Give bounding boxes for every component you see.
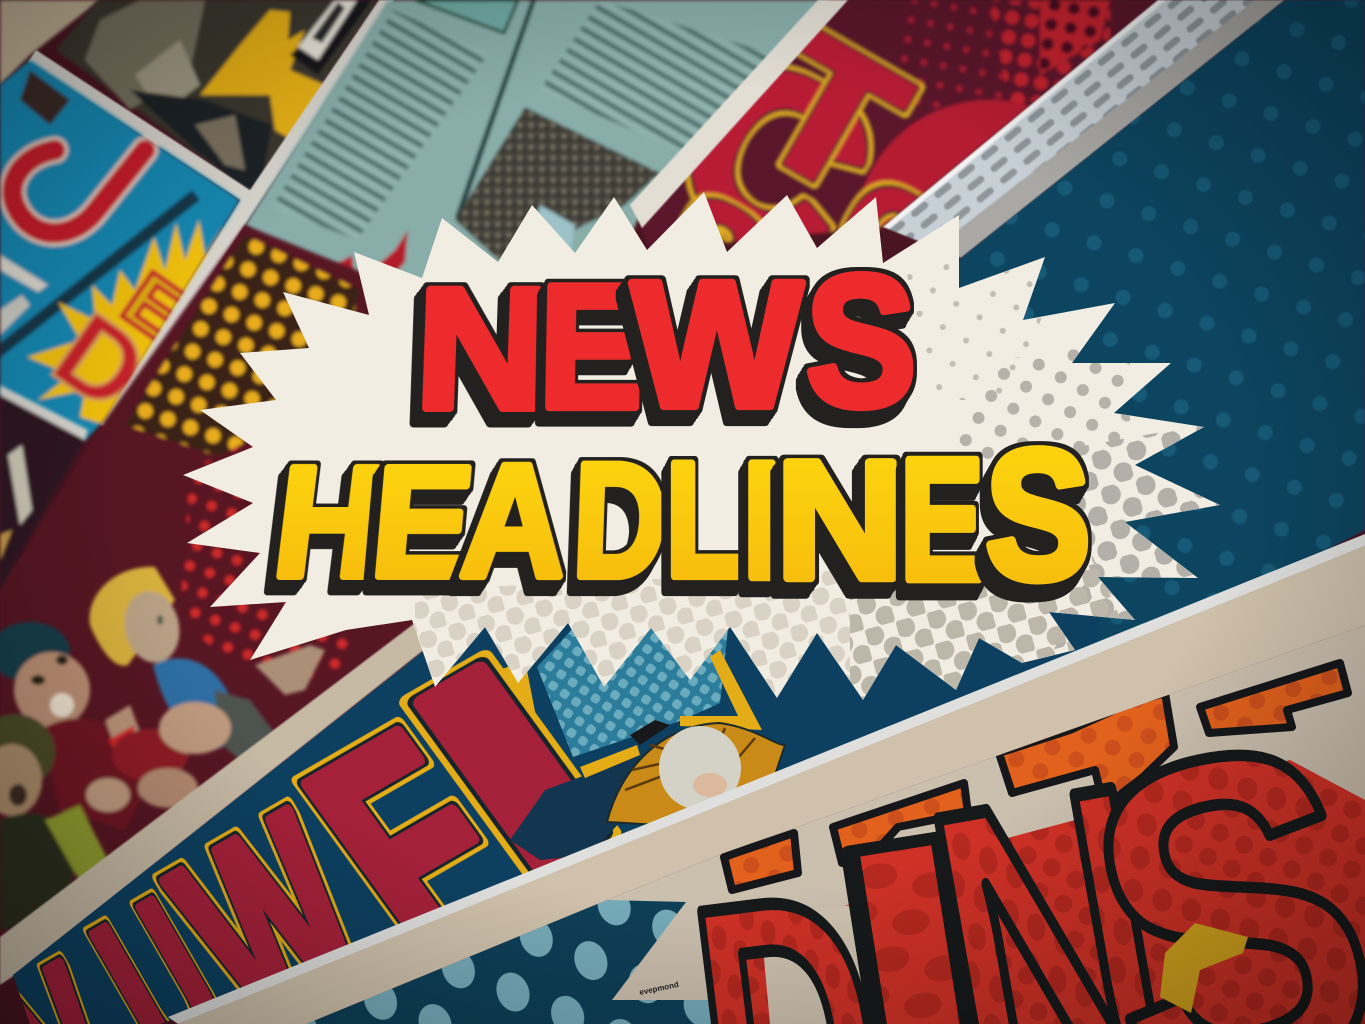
word: HEADLINES: D [570,430,670,610]
word: HEADLINES: I [742,428,782,612]
word: NEWS [413,238,916,445]
word: NEWS: S [806,238,916,445]
illustration: cartoon group of kids [0,567,325,930]
halftone: tiny dots [905,260,1060,400]
panel: navy with red yellow letters [0,600,1100,1024]
word: HEADLINES: S [986,412,1090,618]
panel: lower comic with DINS lettering [300,620,1365,1024]
panel: beige top-left corner [0,0,100,85]
word: HEADLINES: E [900,422,984,616]
orange letter tops [724,663,1348,890]
word: HEADLINES: A [457,432,571,611]
word: HEADLINES: N [776,426,904,614]
panel: navy with red yellow letters: F [258,677,563,1008]
kid: red cap and hands [86,702,231,812]
halftone dense [1040,0,1110,75]
top frame [415,0,518,33]
halftone: gray lower band [850,550,1130,710]
photo in newspaper [455,107,660,265]
halftone: small dots [940,340,1130,500]
word: NEWS: E [538,249,644,445]
panel: silver strip [883,0,1285,258]
D counter backing [760,905,865,1024]
letters DINS [673,640,1365,1024]
panel: teal newspaper page [245,0,830,310]
word: NEWS: N [413,253,551,445]
lower cream strip with white edge [168,534,1365,1024]
panel: blue comic with red J and star [0,60,240,440]
star patch [1160,923,1248,1013]
comic letter E: E [108,255,201,357]
text column left [272,10,489,240]
halftone: beige lower band [415,570,850,710]
panel: maroon with yellow ornate letters: C [817,155,960,314]
signature: evepmond [639,980,680,997]
kid: curly [0,714,108,930]
word: HEADLINES: H [266,434,391,609]
word: HEADLINES: E [366,435,480,610]
panel: navy with red yellow letters: I [361,603,659,931]
halftone small [900,0,1006,110]
beige frame of kids panel [0,623,430,985]
red letter mass [735,760,1365,1024]
title: NEWS HEADLINES [266,238,1090,618]
panel: dark photo comic with yellow figure [56,0,379,193]
white frame left of maroon panel [630,0,848,228]
kid: dark hair [0,622,155,830]
comic letter D: D [33,289,168,435]
starburst [183,192,1230,710]
red halftone [180,400,350,680]
ornate letters: C [637,1,915,314]
word: NEWS: W [632,245,803,445]
panel: maroon with yellow ornate letters: S [638,166,787,336]
panel: maroon with yellow ornate letters: T [729,0,935,234]
icon: yellow star [27,220,223,425]
word: HEADLINES [266,412,1090,618]
kid: blond [89,567,276,760]
panel: maroon halftone left [0,225,430,940]
sun face ornament [510,720,785,860]
panel: white frame of dark comic [28,0,394,428]
word: HEADLINES: L [666,428,742,611]
panel: navy halftone [880,0,1365,720]
text column right [540,0,775,155]
halftone: large dots [1040,420,1230,680]
teal polka dots [306,900,735,1024]
panel: maroon with yellow ornate letters [642,0,1153,247]
kid: small face at right [255,645,325,695]
thin column rule [455,0,536,220]
halftone large [990,0,1110,110]
yellow V lines [680,650,762,730]
yellow halftone [125,235,360,460]
red circle [862,97,1030,229]
red hook J [12,150,145,233]
mesh panel [537,628,728,757]
